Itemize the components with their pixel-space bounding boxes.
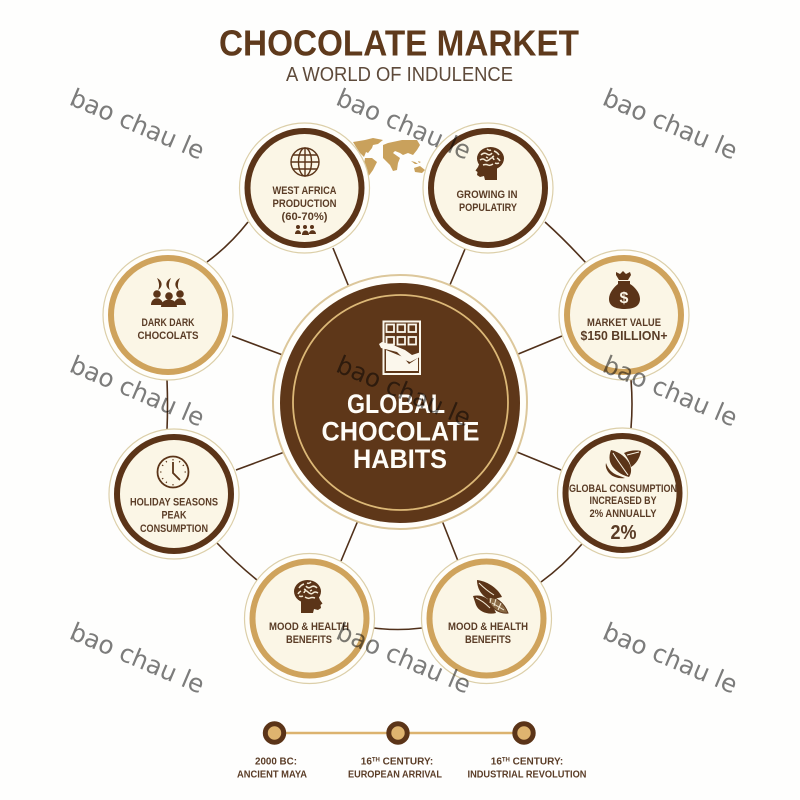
label: west africa: (60-70%): [282, 211, 328, 223]
icon: people: [295, 225, 316, 235]
timeline marker 1: [265, 724, 284, 742]
label: holiday seasons: HOLIDAY SEASONS: [130, 496, 218, 508]
watermarks: bao chau le: [66, 83, 209, 165]
label: growing: POPULATIRY: [459, 202, 518, 214]
connector lines: [167, 222, 632, 630]
watermarks: bao chau le: [66, 350, 209, 432]
timeline: [237, 724, 586, 780]
icon: cocoa pod: [473, 580, 508, 614]
icon: money bag: $: [620, 290, 629, 307]
icon: chocolate bar: [379, 322, 421, 374]
timeline label 3: CENTURY:: [510, 756, 563, 768]
icon: clock: [158, 456, 188, 488]
node: growing in popularity: [423, 123, 553, 253]
icon: world map: [353, 138, 425, 177]
label: growing: [456, 189, 518, 214]
label: growing: GROWING IN: [456, 189, 518, 201]
icon: brain head: [294, 580, 322, 613]
label: mood left: MOOD & HEALTH: [269, 621, 349, 633]
center label: GLOBAL: [347, 389, 445, 419]
label: global consumption: 2%: [610, 522, 637, 544]
label: mood right: [448, 621, 528, 646]
label: dark chocolates: CHOCOLATS: [138, 330, 198, 342]
label: holiday seasons: PEAK: [162, 510, 187, 522]
label: west africa: [272, 185, 337, 223]
node: dark chocolates: [103, 250, 233, 380]
timeline label 2: EUROPEAN ARRIVAL: [348, 770, 442, 780]
label: mood right: BENEFITS: [465, 634, 511, 646]
timeline label 3: INDUSTRIAL REVOLUTION: [468, 770, 586, 780]
watermarks: bao chau le: [332, 350, 475, 432]
timeline label 2: TH: [372, 758, 380, 764]
watermarks: bao chau le: [332, 83, 475, 165]
label: global consumption: 2% ANNUALLY: [590, 508, 657, 520]
center label: CHOCOLATE: [322, 416, 480, 446]
timeline label 3: [468, 756, 586, 780]
watermarks: [66, 83, 742, 699]
watermarks: bao chau le: [332, 617, 475, 699]
center circle: [273, 275, 527, 529]
timeline label 1: 2000 BC:: [255, 756, 297, 768]
center label: HABITS: [353, 444, 447, 474]
label: global consumption: [569, 483, 677, 544]
label: mood right: MOOD & HEALTH: [448, 621, 528, 633]
watermarks: bao chau le: [599, 350, 742, 432]
label: west africa: WEST AFRICA: [272, 185, 337, 197]
label: mood left: [269, 621, 349, 646]
label: mood left: BENEFITS: [286, 634, 332, 646]
icon: brain head: [476, 147, 504, 180]
node: global consumption: [558, 428, 688, 558]
node: mood and health benefits left: [244, 554, 374, 684]
timeline label 2: 16: [361, 756, 372, 768]
node: west africa production: [240, 123, 370, 253]
label: market value: [580, 317, 668, 343]
timeline marker 3: [515, 724, 533, 742]
watermarks: bao chau le: [599, 617, 742, 699]
watermarks: bao chau le: [599, 83, 742, 165]
label: market value: $150 BILLION+: [580, 328, 668, 343]
label: holiday seasons: [130, 496, 218, 535]
timeline label 3: 16: [491, 756, 502, 768]
watermarks: bao chau le: [66, 617, 209, 699]
icon: cocoa beans: [606, 450, 641, 478]
timeline label 3: TH: [502, 758, 510, 764]
subtitle: A WORLD OF INDULENCE: [286, 64, 513, 86]
label: holiday seasons: CONSUMPTION: [140, 523, 208, 535]
timeline label 2: CENTURY:: [380, 756, 433, 768]
label: dark chocolates: [138, 317, 198, 342]
timeline label 1: ANCIENT MAYA: [237, 770, 307, 780]
title: CHOCOLATE MARKET: [219, 22, 579, 64]
node: mood and health benefits right: [422, 554, 552, 684]
center label: [322, 389, 480, 474]
timeline marker 2: [389, 724, 407, 742]
timeline label 2: [348, 756, 442, 780]
label: global consumption: INCREASED BY: [590, 495, 657, 507]
label: global consumption: GLOBAL CONSUMPTION: [569, 483, 677, 495]
node: holiday seasons: [109, 429, 239, 559]
label: market value: MARKET VALUE: [587, 317, 661, 329]
label: dark chocolates: DARK DARK: [142, 317, 195, 329]
timeline label 1: [237, 756, 307, 780]
label: west africa: PRODUCTION: [272, 198, 337, 210]
node: market value: [559, 250, 689, 380]
icon: people with aroma: [151, 278, 186, 307]
icon: globe: [291, 148, 319, 176]
